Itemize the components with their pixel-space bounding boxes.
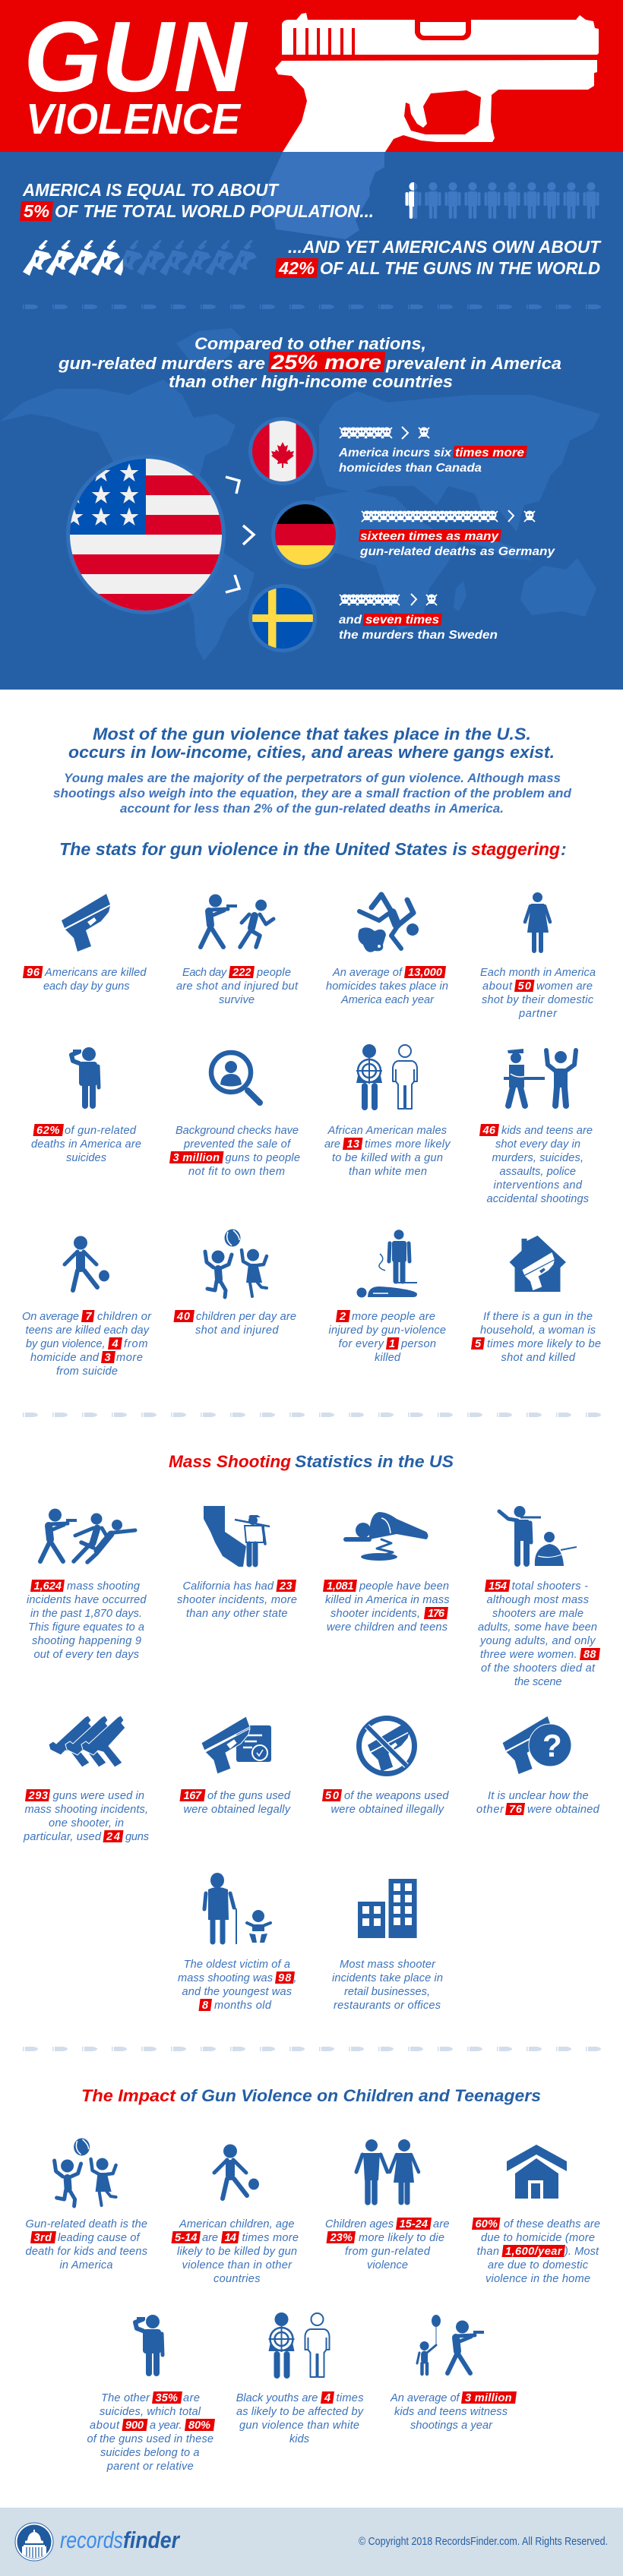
stat: 7 children or teens: 4	[111, 1338, 119, 1350]
heading: impact on children and teenagers: of Gun Violence on Children and Teenagers	[180, 2086, 541, 2105]
stat: third leading cause: leading cause of	[58, 2232, 141, 2244]
stat: 35% suicides: suicides, which total	[100, 2406, 201, 2418]
arrow: to sweden	[226, 575, 239, 592]
arrow: to canada	[226, 477, 239, 494]
icon row: ten rifles, about 42 percent highlighted	[23, 240, 257, 276]
intro paragraph: account for less than 2% of the gun-related deaths in America.	[120, 802, 504, 816]
stat: 2 injured per 1 killed: more people are	[352, 1311, 435, 1323]
stat: 1,624 mass shooting incidents	[27, 1508, 147, 1661]
stat: 60% homicide: 1,600/year	[505, 2246, 563, 2258]
heading: impact on children and teenagers: The Impact	[81, 2086, 177, 2105]
stat: 2 injured per 1 killed	[328, 1230, 446, 1364]
stat: california 23 incidents: 23	[279, 1580, 292, 1593]
intro heading	[68, 724, 555, 762]
stat: ages 5-14: countries	[213, 2273, 260, 2285]
stat: 154 total shooters: three were women.	[480, 1649, 577, 1661]
comparison: germany: gun-related deaths as Germany	[359, 545, 556, 558]
stat: 2 injured per 1 killed: 1	[389, 1338, 395, 1350]
stat: 154 total shooters	[478, 1506, 600, 1688]
stat: 40 children shot: 40	[176, 1311, 190, 1323]
stat: third leading cause: in America	[59, 2259, 112, 2271]
stat: oldest and youngest victims: 8	[202, 2000, 209, 2012]
stat: 35% suicides: 35%	[155, 2392, 178, 2404]
stat: 293 guns: guns were used in	[53, 1790, 144, 1802]
stat: 46 kids and teens: 46	[482, 1125, 496, 1137]
stat: 293 guns: mass shooting incidents,	[24, 1804, 148, 1816]
stat: five percent of population text: OF THE TOTAL WORLD POPULATION...	[55, 201, 374, 221]
stat: five percent of population text	[20, 180, 374, 221]
icon: large white pistol	[275, 13, 599, 152]
stat: 62% suicides: suicides	[66, 1152, 106, 1164]
stat: 62% suicides: 62%	[36, 1125, 60, 1137]
stat: ages 5-14: American children, age	[179, 2218, 295, 2230]
stat: 7 children or teens: 7	[85, 1311, 93, 1323]
stat: ages 5-14: 14	[225, 2232, 236, 2244]
stat: 293 guns: 293	[27, 1790, 48, 1802]
stat: black youths 4 times: 4	[324, 2392, 330, 2404]
comparison: germany	[359, 510, 556, 558]
stat: 3 million witness shootings: kids and teens witness	[394, 2406, 508, 2418]
stat: background checks: guns to people	[225, 1152, 300, 1164]
stat: ages 5-14	[172, 2145, 299, 2285]
panel: blue world comparison section	[0, 152, 623, 690]
stat: 7 children or teens: children or	[97, 1311, 152, 1323]
stat: 1,624 mass shooting incidents: mass shooting	[67, 1580, 140, 1593]
stat: 96 killed each day: each day by guns	[43, 980, 129, 993]
stat: 1,624 mass shooting incidents: shooting happening 9	[32, 1635, 141, 1647]
stat: 13 times more likely: times more likely	[365, 1138, 451, 1151]
stat: background checks: Background checks have	[176, 1125, 299, 1137]
stat: 293 guns: one shooter, in	[49, 1817, 124, 1829]
stat: 1,624 mass shooting incidents: in the past 1,870 days.	[30, 1608, 142, 1620]
stat: 62% suicides: of gun-related	[65, 1125, 137, 1137]
stat: 50 women shot by partner: partner	[518, 1008, 558, 1020]
stat: 50 women shot by partner: about	[482, 980, 513, 993]
stat: 35% suicides	[87, 2315, 215, 2473]
stat: 13 times more likely	[324, 1044, 451, 1178]
stat: 1,624 mass shooting incidents: out of every ten days	[33, 1649, 139, 1661]
stat: gun in household: times more likely to be	[487, 1338, 601, 1350]
stat: five percent of population text: 5%	[24, 201, 49, 221]
stat: black youths 4 times: times	[336, 2392, 363, 2404]
stat: 50 obtained illegally: were obtained illegally	[331, 1804, 445, 1816]
stat: 50 women shot by partner	[480, 892, 596, 1020]
stat: california 23 incidents	[177, 1506, 297, 1620]
headline: compared to other nations	[58, 334, 561, 391]
stat: 7 children or teens: teens are killed each day	[26, 1324, 150, 1337]
comparison: canada	[338, 427, 527, 475]
stat: 40 children shot	[173, 1229, 296, 1337]
stat: ages 5-14: are	[202, 2232, 218, 2244]
stat: 13 times more likely: to be killed with a gun	[332, 1152, 443, 1164]
stat: black youths 4 times: as likely to be affected by	[236, 2406, 365, 2418]
stat: other 76 unknown: other	[476, 1804, 504, 1816]
stat: 2 injured per 1 killed: injured by gun-violence	[328, 1324, 446, 1337]
stat: forty two percent of guns text: 42%	[278, 258, 315, 278]
stat: 13,000 homicides: An average of	[332, 967, 403, 979]
stat: 222 shot and injured: survive	[219, 994, 255, 1006]
icon: american flag circle	[65, 455, 226, 614]
stat: 2 injured per 1 killed: killed	[375, 1352, 401, 1364]
stat: retail businesses: restaurants or offices	[334, 2000, 441, 2012]
stat: oldest and youngest victims: and the youngest was	[182, 1986, 292, 1998]
stat: 60% homicide: are due to domestic	[488, 2259, 589, 2271]
stat: 1,081 killed, 176 children: killed in America in mass	[325, 1594, 450, 1606]
stat: other 76 unknown: It is unclear how the	[488, 1790, 589, 1802]
stat: ages 5-14: 5-14	[175, 2232, 198, 2244]
stat: 60% homicide	[472, 2145, 600, 2285]
intro paragraph: shootings also weigh into the equation, they are a small fraction of the problem and	[53, 787, 572, 800]
stat: 35% suicides: parent or relative	[106, 2461, 194, 2473]
stat: 46 kids and teens: assaults, police	[500, 1166, 576, 1178]
stat: 35% suicides: suicides belong to a	[100, 2447, 199, 2459]
icon: sweden flag circle	[248, 584, 317, 652]
stat: 222 shot and injured: people	[256, 967, 291, 979]
stat: 154 total shooters: adults, some have been	[478, 1621, 597, 1634]
stat: 293 guns: guns	[125, 1831, 149, 1843]
stat: 46 kids and teens: shot every day in	[495, 1138, 580, 1151]
stat: 60% homicide: than	[477, 2246, 499, 2258]
stat: 1,081 killed, 176 children: were children and teens	[327, 1621, 447, 1634]
stat: 50 women shot by partner: 50	[518, 980, 531, 993]
stat: third leading cause: Gun-related death is the	[26, 2218, 147, 2230]
stat: 96 killed each day	[23, 894, 147, 993]
stat: third leading cause: death for kids and teens	[26, 2246, 147, 2258]
stat: 46 kids and teens: kids and teens are	[501, 1125, 593, 1137]
icon: old man with cane and baby	[204, 1873, 270, 1944]
icon: germany flag circle	[271, 500, 340, 569]
arrow: to germany	[243, 526, 254, 545]
headline: compared to other nations: Compared to other nations,	[194, 334, 426, 353]
comparison: germany: sixteen times as many	[360, 530, 500, 543]
title: gun violence: VIOLENCE	[26, 95, 242, 144]
stat: retail businesses: retail businesses,	[344, 1986, 430, 1998]
heading: mass shooting statistics: Statistics in the US	[295, 1452, 454, 1471]
stat: 7 children or teens: from	[124, 1338, 147, 1350]
stat: 46 kids and teens: murders, suicides,	[492, 1152, 583, 1164]
stat: 50 women shot by partner: shot by their domestic	[482, 994, 594, 1006]
stat: 1,624 mass shooting incidents: This figure equates to a	[28, 1621, 144, 1634]
stat: california 23 incidents: than any other state	[186, 1608, 287, 1620]
stat: 35% suicides: a year.	[150, 2420, 182, 2432]
stat: 167 obtained legally: of the guns used	[207, 1790, 291, 1802]
stat: 154 total shooters: shooters are male	[492, 1608, 583, 1620]
stat: 96 killed each day: 96	[27, 967, 40, 979]
comparison: sweden: the murders than Sweden	[339, 629, 498, 642]
stat: 60% homicide: 60%	[476, 2218, 498, 2230]
stat: background checks: 3 million	[173, 1152, 220, 1164]
stat: gun in household: shot and killed	[501, 1352, 576, 1364]
heading: the stats are staggering: :	[561, 839, 567, 859]
comparison: sweden	[339, 594, 498, 642]
stat: 13 times more likely: are	[324, 1138, 340, 1151]
stat: 1,081 killed, 176 children: people have been	[359, 1580, 449, 1593]
stat: ages 5-14: violence than in other	[182, 2259, 293, 2271]
logo: recordsfinder: finder	[123, 2527, 181, 2553]
stat: california 23 incidents: shooter incidents, more	[177, 1594, 297, 1606]
comparison: sweden: seven times	[365, 614, 439, 627]
stat: retail businesses: Most mass shooter	[340, 1959, 436, 1971]
stat: 154 total shooters: although most mass	[486, 1594, 589, 1606]
icon: falling person with blood	[358, 895, 419, 952]
stat: retail businesses	[332, 1879, 443, 2012]
stat: 7 children or teens	[22, 1236, 152, 1378]
stat: ages 15-24: 23%	[330, 2232, 353, 2244]
stat: 13,000 homicides: America each year	[340, 994, 435, 1006]
heading: mass shooting statistics	[169, 1452, 454, 1471]
stat: 222 shot and injured: are shot and injured but	[176, 980, 299, 993]
heading: the stats are staggering: staggering	[471, 839, 560, 859]
stat: 3 million witness shootings	[390, 2315, 517, 2432]
stat: 35% suicides: of the guns used in these	[87, 2433, 213, 2445]
stat: gun in household	[471, 1236, 601, 1364]
panel: footer	[0, 2508, 623, 2576]
stat: forty two percent of guns text: OF ALL THE GUNS IN THE WORLD	[320, 258, 600, 278]
stat: 35% suicides: 80%	[188, 2420, 210, 2432]
comparison: canada: homicides than Canada	[339, 462, 482, 475]
stat: 154 total shooters: the scene	[514, 1676, 562, 1688]
stat: ages 15-24: more likely to die	[359, 2232, 444, 2244]
stat: 50 women shot by partner: Each month in America	[480, 967, 596, 979]
stat: 35% suicides: The other	[101, 2392, 150, 2404]
icon: canada flag circle	[248, 417, 317, 485]
icon: california with shooter	[204, 1506, 270, 1567]
intro heading: Most of the gun violence that takes place in the U.S.	[93, 724, 531, 743]
stat: gun in household: household, a woman is	[480, 1324, 596, 1337]
icon: woman	[525, 892, 550, 951]
intro paragraph: Young males are the majority of the perpetrators of gun violence. Although mass	[64, 772, 561, 785]
stat: 13,000 homicides: 13,000	[408, 967, 442, 979]
stat: 222 shot and injured: 222	[232, 967, 251, 979]
stat: oldest and youngest victims	[178, 1873, 297, 2012]
stat: other 76 unknown	[476, 1716, 600, 1816]
icon: police officer and person with hands up	[504, 1049, 576, 1106]
comparison: canada: times more	[455, 447, 524, 459]
icon: prohibited pistol	[359, 1718, 415, 1774]
stat: 46 kids and teens: accidental shootings	[486, 1193, 589, 1205]
stat: black youths 4 times: gun violence than white	[239, 2420, 359, 2432]
stat: ages 15-24: violence	[367, 2259, 408, 2271]
stat: 154 total shooters: 88	[583, 1649, 596, 1661]
stat: 46 kids and teens: interventions and	[494, 1179, 583, 1192]
stat: 1,081 killed, 176 children: 176	[428, 1608, 445, 1620]
icon: office buildings	[358, 1879, 417, 1938]
stat: 40 children shot: shot and injured	[195, 1324, 279, 1337]
stat: oldest and youngest victims: mass shooting was	[178, 1972, 273, 1984]
intro heading: occurs in low-income, cities, and areas where gangs exist.	[68, 743, 555, 762]
stat: forty two percent of guns text	[275, 237, 602, 278]
stat: ages 5-14: likely to be killed by gun	[177, 2246, 297, 2258]
icon: shooter and victim	[201, 895, 274, 947]
stat: ages 15-24: Children ages	[325, 2218, 394, 2230]
stat: 35% suicides: 900	[125, 2420, 144, 2432]
stat: oldest and youngest victims: 98	[278, 1972, 292, 1984]
panel: header	[0, 0, 623, 152]
headline: compared to other nations: 25% more	[270, 351, 381, 374]
icon: house	[507, 2145, 567, 2199]
headline: compared to other nations: than other high-income countries	[169, 372, 453, 391]
stat: background checks	[169, 1053, 300, 1178]
stat: 7 children or teens: 3	[105, 1352, 111, 1364]
stat: other 76 unknown: were obtained	[527, 1804, 600, 1816]
stat: 1,081 killed, 176 children: shooter incidents,	[330, 1608, 420, 1620]
stat: five percent of population text: AMERICA IS EQUAL TO ABOUT	[22, 180, 280, 200]
stat: black youths 4 times: kids	[289, 2433, 309, 2445]
headline: compared to other nations: prevalent in America	[385, 354, 561, 373]
heading: the stats are staggering: The stats for gun violence in the United States is	[59, 839, 467, 859]
icon: child with balloon and shooter	[417, 2315, 484, 2374]
title: gun violence: GUN	[24, 1, 248, 112]
heading: mass shooting statistics: Mass Shooting	[169, 1452, 292, 1471]
stat: 1,081 killed, 176 children: 1,081	[327, 1580, 354, 1593]
stat: third leading cause	[26, 2139, 147, 2271]
stat: 60% homicide: ). Most	[563, 2246, 599, 2258]
stat: 154 total shooters: of the shooters died at	[481, 1662, 596, 1675]
stat: 7 children or teens: by gun violence,	[26, 1338, 105, 1350]
stat: 293 guns: particular, used	[23, 1831, 102, 1843]
stat: 62% suicides: deaths in America are	[31, 1138, 141, 1151]
stat: 60% homicide: due to homicide (more	[481, 2232, 595, 2244]
stat: oldest and youngest victims: months old	[214, 2000, 272, 2012]
stat: 50 obtained illegally	[322, 1718, 449, 1816]
stat: 3 million witness shootings: shootings a year	[410, 2420, 493, 2432]
intro paragraph	[53, 772, 572, 816]
stat: other 76 unknown: 76	[509, 1804, 523, 1816]
stat: third leading cause: 3rd	[33, 2232, 52, 2244]
stat: 154 total shooters: total shooters -	[512, 1580, 588, 1593]
stat: 60% homicide: violence in the home	[485, 2273, 590, 2285]
stat: 2 injured per 1 killed: person	[400, 1338, 436, 1350]
stat: retail businesses: incidents take place in	[332, 1972, 443, 1984]
comparison: canada: America incurs six	[338, 447, 452, 459]
stat: 96 killed each day: Americans are killed	[44, 967, 147, 979]
icon: shooter and two fleeing people	[40, 1508, 135, 1562]
stat: 2 injured per 1 killed: for every	[339, 1338, 385, 1350]
stat: 13 times more likely: than white men	[349, 1166, 427, 1178]
stat: 13,000 homicides: homicides takes place in	[326, 980, 448, 993]
icon: standing and kneeling shooters	[499, 1506, 577, 1566]
stat: oldest and youngest victims: ,	[293, 1972, 297, 1984]
stat: 7 children or teens: On average	[22, 1311, 79, 1323]
icon: pistol and question mark	[503, 1716, 571, 1774]
pistol grip watermark	[258, 152, 384, 239]
stat: 7 children or teens: from suicide	[56, 1365, 118, 1378]
stat: ages 5-14: times more	[242, 2232, 299, 2244]
stat: 1,081 killed, 176 children	[323, 1512, 450, 1634]
icon: pistol and certificate	[201, 1716, 271, 1774]
stat: 222 shot and injured: Each day	[182, 967, 228, 979]
stat: 3 million witness shootings: 3 million	[465, 2392, 512, 2404]
icon: standing figure and lying figure	[357, 1230, 417, 1297]
icon row: ten people, half of one highlighted	[406, 182, 599, 219]
stat: 154 total shooters: young adults, and only	[479, 1635, 596, 1647]
stat: 40 children shot: children per day are	[196, 1311, 296, 1323]
stat: 50 women shot by partner: women are	[536, 980, 593, 993]
logo: recordsfinder	[15, 2523, 181, 2561]
stat: gun in household: 5	[475, 1338, 482, 1350]
stat: ages 15-24: are	[433, 2218, 450, 2230]
stat: 167 obtained legally: 167	[184, 1790, 202, 1802]
stat: california 23 incidents: California has had	[182, 1580, 274, 1593]
stat: background checks: prevented the sale of	[183, 1138, 292, 1151]
stat: 46 kids and teens	[479, 1049, 593, 1205]
stat: 7 children or teens: homicide and	[30, 1352, 100, 1364]
stat: 1,624 mass shooting incidents: 1,624	[33, 1580, 62, 1593]
stat: 50 obtained illegally: of the weapons used	[344, 1790, 449, 1802]
stat: ages 15-24	[325, 2139, 450, 2271]
stat: 1,624 mass shooting incidents: incidents have occurred	[27, 1594, 147, 1606]
logo: recordsfinder: records	[60, 2527, 123, 2553]
icon: lying person with blood	[346, 1512, 429, 1561]
stat: 62% suicides	[31, 1047, 141, 1164]
stat: ages 15-24: from gun-related	[345, 2246, 431, 2258]
stat: 13,000 homicides	[326, 895, 448, 1006]
stat: 293 guns	[23, 1716, 149, 1843]
comparison: sweden: and	[339, 614, 362, 627]
world map background	[0, 328, 600, 661]
stat: 154 total shooters: 154	[489, 1580, 507, 1593]
stat: 50 obtained illegally: 50	[325, 1790, 339, 1802]
stat: 35% suicides: about	[90, 2420, 120, 2432]
stat: 167 obtained legally: were obtained legally	[184, 1804, 292, 1816]
stat: background checks: not fit to own them	[188, 1166, 285, 1178]
icon: house with pistol	[509, 1236, 566, 1292]
stat: 293 guns: 24	[106, 1831, 120, 1843]
stat: forty two percent of guns text: ...AND YET AMERICANS OWN ABOUT	[288, 237, 602, 257]
stat: oldest and youngest victims: The oldest victim of a	[184, 1959, 290, 1971]
icon: couple	[356, 2139, 419, 2202]
stat: black youths 4 times: Black youths are	[236, 2392, 318, 2404]
headline: compared to other nations: gun-related murders are	[58, 354, 265, 373]
stat: black youths 4 times	[236, 2312, 365, 2445]
stat: 13 times more likely: African American males	[327, 1125, 447, 1137]
stat: 2 injured per 1 killed: 2	[339, 1311, 346, 1323]
icon: magnifying glass on person	[211, 1053, 260, 1103]
icon: three submachine guns	[49, 1716, 125, 1767]
icon: pistol and question mark: ?	[542, 1728, 562, 1763]
stat: 7 children or teens: more	[116, 1352, 143, 1364]
stat: ages 15-24: 15-24	[400, 2218, 428, 2230]
stat: 60% homicide: of these deaths are	[504, 2218, 600, 2230]
stat: gun in household: If there is a gun in the	[483, 1311, 593, 1323]
stat: 13 times more likely: 13	[346, 1138, 359, 1151]
stat: 35% suicides: are	[183, 2392, 200, 2404]
stat: 167 obtained legally	[179, 1716, 292, 1816]
stat: 3 million witness shootings: An average of	[390, 2392, 461, 2404]
stat: 222 shot and injured	[176, 895, 299, 1006]
